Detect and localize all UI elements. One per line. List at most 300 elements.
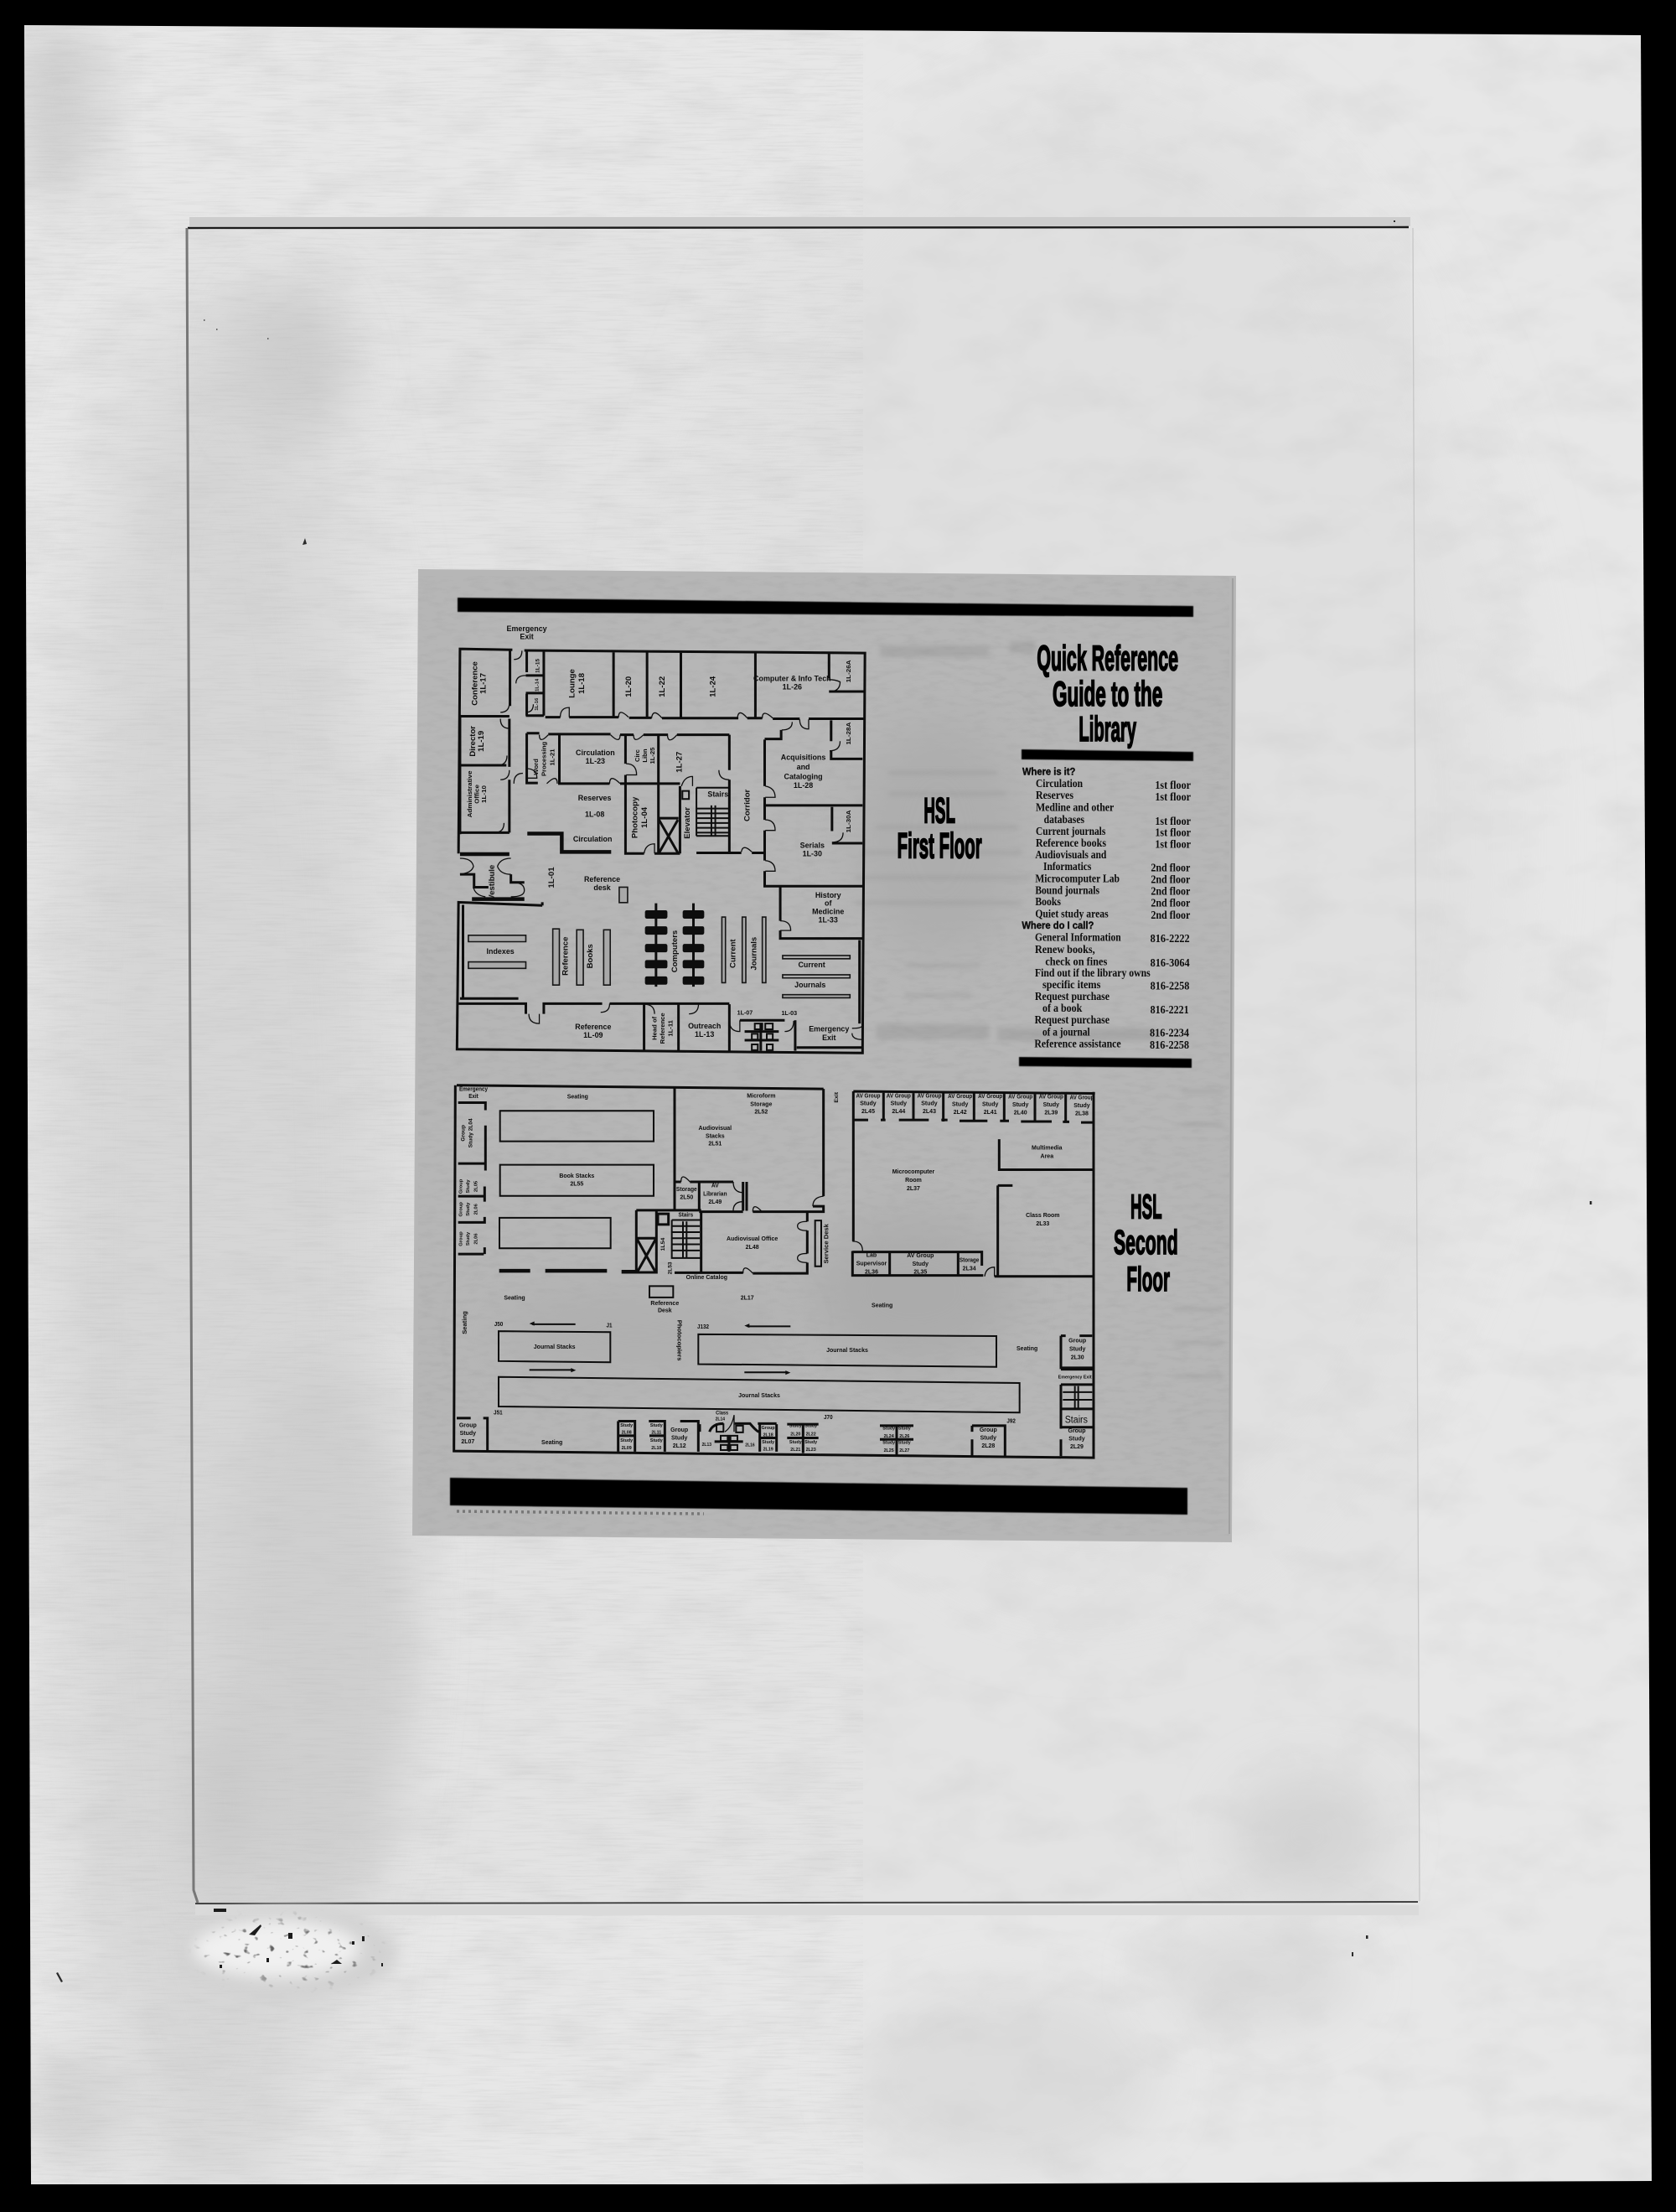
second floor room labels: 2L14 [716,1417,725,1422]
where is it section: 1st floor [1155,837,1191,851]
where do i call section: Renew books, [1035,942,1095,956]
first floor room labels: 1L-14 [535,678,540,692]
second floor plan [454,1085,1095,1458]
second floor room labels: Study 2L04 [468,1118,474,1147]
door swings [494,650,862,1039]
first floor room labels: Exit [822,1033,835,1042]
second floor right-side labels: 2L38 [1075,1109,1089,1116]
where is it section: 1st floor [1155,825,1191,839]
where do i call section: 816-2258 [1151,979,1190,992]
first floor room labels: Administrative [466,770,473,817]
north rooms [525,652,864,719]
speckled damage at lower left [180,1907,398,1999]
rule under list [1019,1057,1192,1068]
where is it section [1022,767,1191,921]
first floor room labels: Reserves [578,794,611,802]
second floor room labels: Group [762,1426,775,1431]
first floor room labels: 1L-18 [577,673,586,694]
where do i call section: Find out if the library owns [1035,966,1151,979]
first floor room labels: 1L-16 [535,698,540,711]
first floor room labels: Emergency [507,624,547,633]
rule under title [1022,749,1193,761]
reference shelves [553,929,610,985]
second floor right-side labels: 2L26 [899,1434,909,1439]
second floor room labels: Seating [504,1293,525,1301]
first floor room labels: Reference [575,1023,611,1031]
first floor room labels: desk [593,883,612,892]
second floor room labels: 2L20 [790,1432,800,1438]
second floor room labels: Microform [747,1091,776,1100]
current journal shelves [722,917,850,997]
second floor right-side labels: Multimedia [1032,1143,1063,1152]
second floor right-side labels: AV Group [1008,1095,1032,1101]
first floor room labels: Stairs [707,790,728,799]
second floor right-side labels: AV Group [1039,1095,1063,1101]
first floor room labels: 1L-07 [737,1008,753,1016]
second floor right-side labels: Emergency Exit [1058,1375,1092,1381]
second floor room labels: Audiovisual [699,1124,732,1132]
where do i call section: check on fines [1045,954,1107,968]
bottom black bar [450,1478,1187,1515]
direction arrows [530,1322,790,1375]
second floor right-side labels: 2L36 [865,1267,878,1276]
quick reference title [1037,639,1178,749]
second floor right-side labels: 2L24 [884,1434,895,1439]
elevator and stairs [636,1210,701,1272]
second floor right-side labels: Study [980,1433,997,1442]
second floor right-side labels: 2L44 [892,1107,906,1115]
second floor room labels: Stacks [706,1132,725,1139]
first floor room labels: Reference [659,1013,666,1044]
first floor room labels: Journals [794,981,825,989]
first floor room labels: 1L-28 [794,781,813,790]
second floor right-side labels: 2L40 [1014,1108,1027,1116]
second floor room labels: 2L48 [746,1243,759,1251]
second floor room labels: Group [459,1179,463,1194]
first floor room labels: 1L-20 [624,676,633,697]
second floor room labels: Study [620,1438,634,1443]
second floor room labels: Online Catalog [686,1273,727,1281]
where is it section: Quiet study areas [1035,906,1109,920]
second floor room labels: 2L17 [741,1293,754,1301]
first floor room labels: 1L-26 [783,682,802,691]
first floor room labels: 1L-23 [586,757,605,765]
elevator shaft [659,818,679,852]
second floor room labels: 2L08 [622,1431,632,1436]
second floor right-side labels: 2L42 [954,1108,967,1116]
second floor room labels: 2L55 [570,1179,583,1187]
where do i call section: of a journal [1042,1024,1090,1039]
study table [715,1415,743,1452]
first floor room labels: Indexes [487,947,515,956]
first floor room labels: Exit [520,632,534,641]
first floor room labels: Photocopy [631,796,639,838]
first floor heading: HSL [923,791,955,831]
second floor right-side labels: Study [860,1099,877,1107]
where do i call section: specific items [1042,977,1100,991]
second floor room labels [459,1086,840,1453]
second floor heading: Floor [1126,1261,1170,1298]
second floor room labels: Study [804,1424,818,1429]
second floor room labels: Study [650,1438,664,1443]
first floor room labels: Computers [670,930,679,972]
second floor room labels: Seating [461,1311,468,1334]
first floor room labels: and [797,763,810,771]
first floor room labels: Circ [634,749,641,762]
second floor right-side labels: Study [1043,1101,1060,1108]
second floor room labels: Exit [468,1094,479,1100]
second floor right-side labels: Stairs [1065,1415,1088,1425]
first floor room labels: Current [729,939,737,968]
second floor room labels: Journal Stacks [534,1343,576,1350]
where do i call section: of a book [1042,1001,1083,1014]
first floor room labels: Emergency [809,1024,850,1033]
first floor heading: First Floor [897,827,982,866]
second floor room labels: J70 [824,1415,833,1421]
index tables [468,935,525,968]
where is it section: Medline and other [1036,800,1115,814]
second floor room labels: Storage [750,1100,772,1108]
second floor right-side labels: 2L43 [923,1107,936,1115]
book stacks [499,1111,654,1248]
second floor room labels: Group [459,1231,463,1246]
first floor room labels: Medicine [812,907,844,916]
first floor room labels: Director [468,726,477,757]
first floor room labels: Journals [750,937,758,971]
first floor room labels: 1L-27 [675,752,683,773]
second floor right-side labels: AV Group [948,1094,972,1100]
second floor room labels: Emergency [459,1086,488,1092]
second floor room labels: Study [789,1424,803,1429]
first floor room labels: 1L-26A [845,660,852,682]
second floor right-side labels: Lab [866,1251,877,1259]
second floor right-side labels: Group [980,1426,997,1433]
where is it section: Audiovisuals and [1035,847,1107,861]
mounted inner page [188,227,1420,1904]
second floor room labels: Stairs [679,1212,693,1219]
where is it section: 2nd floor [1151,895,1191,909]
west offices [460,650,510,834]
quick reference list [1022,767,1191,1051]
audiovisual office walls [675,1182,807,1273]
first floor room labels: Corridor [743,789,751,821]
first floor room labels: Current [798,961,825,969]
second floor room labels: 1L54 [660,1237,666,1251]
second floor room labels: 2L11 [651,1431,661,1436]
first floor room labels: 1L-09 [583,1031,603,1039]
second floor right-side labels: AV Group [978,1094,1002,1100]
where do i call section: 816-2258 [1150,1038,1190,1051]
second floor room labels: 2L16 [745,1443,755,1448]
second floor room labels: Exit [834,1091,840,1103]
second floor room labels: Study [804,1440,818,1445]
first floor room labels: 1L-13 [695,1030,714,1039]
reference desk [649,1286,673,1298]
paper grain [25,25,863,2188]
where is it section: 2nd floor [1151,908,1191,921]
first floor room labels: Libn [641,749,649,763]
second floor room labels: 2L05 [474,1181,478,1192]
first floor room labels: 1L-28A [845,722,852,745]
second floor right-side labels: 2L30 [1071,1353,1084,1360]
second floor room labels: Class [716,1411,729,1417]
second floor room labels: 2L52 [754,1107,768,1116]
page frame [187,217,1420,1915]
second floor room labels: Study [466,1231,471,1246]
where do i call section: General Information [1035,930,1121,944]
second floor right-side labels: 2L33 [1036,1220,1049,1227]
second floor room labels: 2L12 [673,1442,686,1449]
west study rooms [458,1102,485,1254]
first floor room labels: 1L-01 [547,867,556,888]
first floor room labels: 1L-22 [658,676,666,697]
first floor room labels: Books [586,944,594,968]
where is it section: 2nd floor [1151,884,1191,898]
second floor room labels: Librarian [703,1191,727,1197]
second floor room labels: 2L21 [790,1448,800,1453]
second floor room labels: Reference [650,1299,679,1307]
south study rooms [457,1418,1005,1456]
second floor right-side labels: Study [891,1099,908,1107]
first floor room labels: Conference [471,661,478,706]
first floor room labels: Reference [561,937,569,976]
second floor room labels: Study [460,1429,477,1437]
where is it section: 2nd floor [1151,873,1191,886]
east rooms [764,720,862,1023]
first floor heading [897,791,982,866]
second floor room labels: Audiovisual Office [727,1235,778,1242]
second floor right-side labels: Group [1068,1427,1086,1434]
second floor right-side labels: Study [921,1099,939,1107]
second floor right-side labels: 2L27 [899,1448,909,1453]
where is it section: Informatics [1043,859,1091,873]
first floor room labels: 1L-30A [845,810,852,832]
quick reference title: Library [1079,710,1136,749]
second floor room labels: 2L07 [461,1438,474,1445]
service desk [815,1220,821,1267]
study table [745,1023,779,1051]
second floor room labels: Book Stacks [559,1172,594,1179]
newsprint clipping panel [412,569,1236,1542]
where is it section: Microcomputer Lab [1035,871,1120,885]
second floor room labels: Seating [541,1438,562,1446]
computer workstations [645,904,704,987]
first floor room labels: Lounge [568,669,577,698]
second floor room labels: Photocopiers [675,1320,683,1360]
south rooms [458,904,862,1051]
second floor heading [1114,1189,1178,1298]
second floor right-side labels: 2L28 [981,1442,995,1449]
where do i call section: 816-2221 [1151,1002,1189,1016]
second floor room labels: 2L50 [680,1193,693,1201]
where is it section: Bound journals [1035,883,1099,897]
second floor room labels: 2L49 [708,1198,722,1205]
partition [499,1271,635,1272]
second floor right-side labels: 2L37 [907,1184,920,1192]
where do i call section: Reference assistance [1034,1036,1121,1050]
second floor right-side labels: Seating [872,1301,892,1309]
second floor room labels: 2L13 [702,1443,711,1448]
second floor right-side labels: Study [1073,1101,1091,1109]
second floor room labels: Study [466,1179,471,1194]
second floor right-side labels: Study [898,1441,912,1446]
second floor right-side labels: 2L41 [984,1108,997,1116]
second floor room labels: 2L09 [622,1446,632,1451]
second floor right-side labels: Class Room [1026,1211,1060,1219]
second floor room labels: Study [671,1433,688,1442]
second floor room labels: 2L19 [763,1447,773,1452]
first floor room labels: 1L-25 [649,748,656,764]
halftone strip below bar [457,1511,704,1514]
where is it section: databases [1044,812,1084,826]
second floor heading: Second [1114,1225,1178,1262]
where is it section: Current journals [1036,824,1105,837]
second floor room labels: Storage [676,1187,697,1193]
exterior walls [454,1085,1094,1458]
second floor room labels: Study [466,1202,471,1216]
stairs [682,788,763,852]
second floor right-side labels: 2L34 [963,1264,977,1272]
where is it section: Books [1035,894,1061,908]
where do i call section: Where do I call? [1022,920,1094,931]
second floor room labels: AV [711,1183,719,1189]
second floor room labels: 2L51 [708,1139,722,1147]
where is it section: Reserves [1036,788,1073,802]
second floor room labels: 2L10 [651,1446,661,1451]
first floor room labels: Circulation [573,835,613,843]
second floor room labels: Service Desk [823,1223,830,1264]
second floor right-side labels: AV Group [907,1251,934,1259]
audiovisual stacks walls [675,1088,824,1212]
second floor room labels: J1 [606,1323,613,1329]
second floor room labels: Study [762,1440,775,1445]
first floor room labels: of [825,899,832,908]
first floor room labels: Computer & Info Tech [753,674,831,682]
second floor right-side labels: Study [898,1426,912,1432]
first floor room labels: Elevator [683,807,691,839]
first floor room labels: 1L-10 [480,785,488,803]
second floor room labels: Group [461,1125,467,1142]
first floor room labels [466,624,852,1044]
quick reference title: Quick Reference [1037,639,1178,678]
second floor room labels: Study [620,1423,634,1428]
where do i call section: 816-2234 [1150,1025,1190,1039]
second floor right-side labels: Area [1041,1152,1054,1159]
second floor right-side labels: Journal Stacks [826,1346,868,1354]
second floor room labels: Study [650,1423,664,1428]
second floor right-side labels: Study [882,1441,896,1446]
first floor room labels: Cataloging [784,772,823,781]
exterior walls [457,649,865,1053]
where is it section: 1st floor [1155,814,1191,827]
second floor room labels: 2L18 [763,1432,773,1438]
second floor right-side labels: Microcomputer [892,1168,934,1175]
where is it section: Reference books [1036,836,1106,849]
first floor room labels: History [815,891,841,899]
second floor room labels: Group [459,1201,463,1216]
first floor room labels: 1L-24 [709,676,716,697]
second floor room labels: 2L53 [668,1261,674,1274]
first floor room labels: 1L-03 [781,1009,797,1017]
where do i call section: 816-2222 [1151,931,1190,945]
second floor right-side labels: AV Group [887,1093,911,1099]
second floor room labels: J132 [697,1324,709,1330]
second floor right-side labels: 2L29 [1070,1443,1084,1450]
second floor right-side labels: Storage [960,1257,980,1264]
first floor room labels: 1L-04 [640,806,649,828]
second floor room labels: 2L22 [806,1432,816,1438]
second floor right-side labels: Study [882,1426,896,1432]
where do i call section: 816-3064 [1151,956,1190,969]
first floor room labels: Outreach [688,1022,722,1030]
top black rule [458,598,1193,617]
second floor room labels: Group [670,1426,689,1433]
second floor room labels: Group [459,1421,477,1429]
where is it section: 2nd floor [1151,861,1191,874]
first floor room labels: Processing [541,741,547,776]
first floor room labels: 1L-08 [585,810,604,819]
second floor right-side labels: 2L45 [861,1107,875,1115]
second floor right-side labels: Study [1012,1101,1029,1108]
clipping texture [418,576,1233,1536]
second floor right-side labels: Study [1068,1434,1086,1443]
first floor room labels: Serials [800,841,825,850]
second floor room labels: Study [789,1440,803,1445]
stray marks [56,220,1592,1982]
first floor room labels: Office [473,784,480,804]
first floor room labels: 1L-15 [535,658,541,673]
second floor right-side labels: AV Group [917,1093,941,1099]
first floor room labels: Circulation [576,749,615,757]
second floor right-side labels: AV Group [856,1093,881,1099]
where is it section: 1st floor [1155,790,1191,804]
journal stacks [499,1331,1020,1412]
where is it section: 1st floor [1155,778,1191,791]
where do i call section [1022,920,1190,1051]
second floor heading: HSL [1130,1189,1162,1226]
first floor room labels: 1L-17 [479,673,487,694]
second floor right-side labels: 2L35 [913,1267,927,1276]
first floor room labels: Reference [584,875,620,883]
quick reference title: Guide to the [1053,675,1162,714]
where do i call section: Request purchase [1035,989,1110,1002]
first floor room labels: Vestibule [488,865,496,900]
restrooms [525,651,544,716]
second floor room labels: Desk [658,1306,673,1314]
first floor room labels: 1L-33 [819,915,838,925]
first floor room labels: 1L-30 [803,849,822,858]
circulation desk [527,834,611,852]
second floor right-side labels: Study [913,1260,929,1267]
AV group study rooms and microcomputer room walls [852,1091,1095,1456]
second floor right-side labels: AV Group [1069,1095,1094,1101]
second floor right-side labels: 2L39 [1044,1108,1058,1116]
where is it section: Circulation [1036,776,1083,790]
second floor right-side labels [826,1093,1094,1453]
second floor right-side labels: Room [905,1176,922,1184]
reference desk [619,887,628,903]
second floor right-side labels: Study [982,1100,999,1108]
second floor right-side labels: Study [952,1100,969,1108]
second floor room labels: Seating [567,1092,588,1100]
second floor right-side labels: J92 [1006,1418,1016,1424]
second floor room labels: Journal Stacks [738,1391,780,1399]
door swings [681,1177,824,1273]
first floor room labels: 1L-11 [667,1020,674,1037]
where is it section: Where is it? [1022,767,1076,778]
first floor room labels: 1L-19 [477,731,485,752]
first floor room labels: Acquisitions [781,753,825,762]
